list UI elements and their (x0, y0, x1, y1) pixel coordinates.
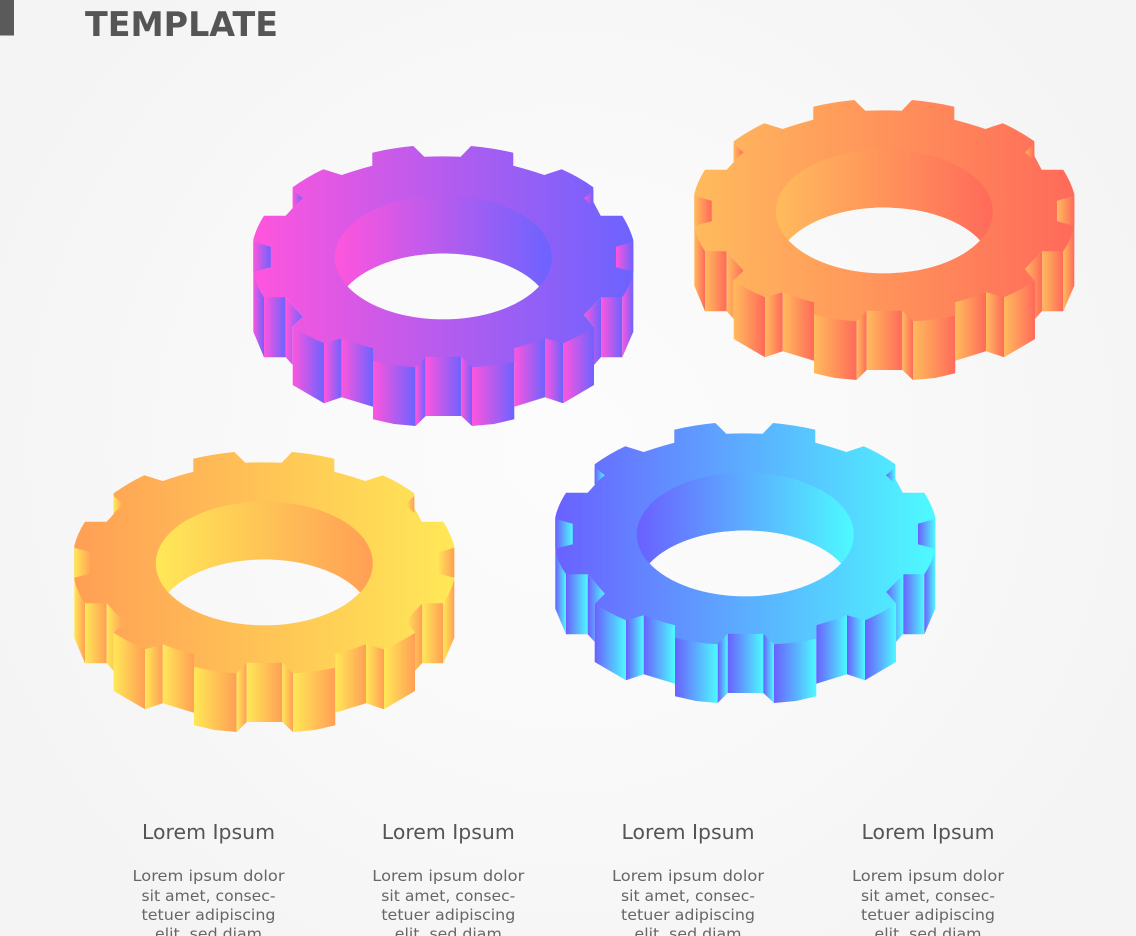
text column 4: Lorem ipsum dolor (852, 867, 1005, 885)
text column 4: tetuer adipiscing (861, 906, 995, 924)
text column 2 (372, 820, 525, 936)
title: TEMPLATE (85, 5, 278, 45)
corner accent block (0, 0, 14, 36)
text column 2: tetuer adipiscing (381, 906, 515, 924)
text column 3: Lorem ipsum dolor (612, 867, 765, 885)
text column 1: Lorem Ipsum (142, 820, 275, 844)
text column 4: sit amet, consec- (861, 887, 995, 905)
text column 1 (132, 820, 285, 936)
text column 2: Lorem Ipsum (382, 820, 515, 844)
text column 2: sit amet, consec- (381, 887, 515, 905)
gear: yellow (74, 452, 454, 732)
text column 2: Lorem ipsum dolor (372, 867, 525, 885)
text column 3: tetuer adipiscing (621, 906, 755, 924)
text column 1: Lorem ipsum dolor (132, 867, 285, 885)
text column 3: sit amet, consec- (621, 887, 755, 905)
text column 4: Lorem Ipsum (862, 820, 994, 844)
text column 3 (612, 820, 765, 936)
gear: purple (253, 146, 633, 426)
text column 1: sit amet, consec- (142, 887, 276, 905)
text column 4 (852, 820, 1005, 936)
text column 3: Lorem Ipsum (622, 820, 754, 844)
text column 1: tetuer adipiscing (142, 906, 275, 924)
gear: blue (555, 423, 935, 703)
gear: orange (694, 100, 1074, 380)
